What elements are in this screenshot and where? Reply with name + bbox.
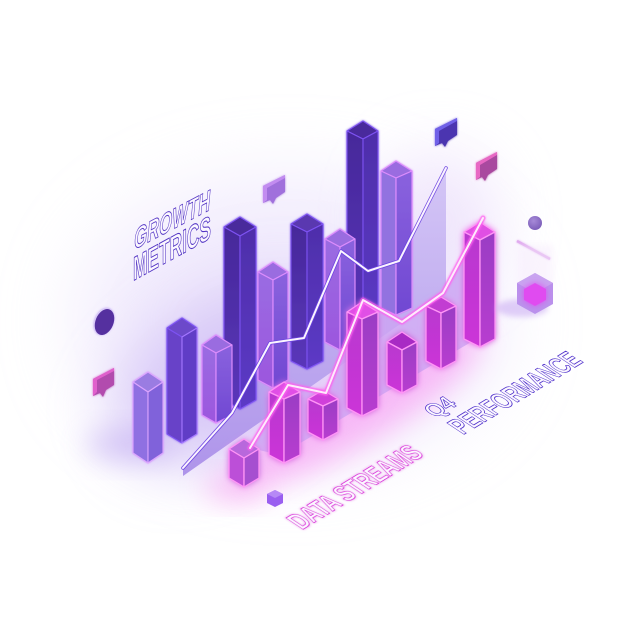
icon: light streak <box>517 241 550 259</box>
bar 1 <box>133 372 163 463</box>
bar 7 <box>325 229 355 350</box>
purple trend line <box>183 168 446 468</box>
label: GROWTH METRICS: GROWTH <box>133 182 212 257</box>
bars: purple back row <box>133 121 412 463</box>
pink bar 4 <box>347 302 378 416</box>
label: GROWTH METRICS: METRICS <box>133 209 211 289</box>
icon: magenta speech bubble <box>476 152 497 181</box>
icon: dark speech bubble <box>435 118 457 147</box>
icon: small hexagon <box>267 490 283 507</box>
icon: purple speech bubble top <box>263 175 285 204</box>
label: Q4 PERFORMANCE: Q4 <box>418 393 463 421</box>
bar 6 <box>291 214 323 369</box>
bar 8 <box>347 121 378 340</box>
area under pink line <box>250 218 483 455</box>
bar 4 <box>224 217 256 409</box>
icon: sphere <box>528 216 542 230</box>
floor glow: pink <box>205 310 496 510</box>
label: DATA STREAMS: DATA STREAMS <box>279 440 430 534</box>
pink bar 2 <box>269 382 300 463</box>
icon: glass cube <box>496 245 553 317</box>
label: Q4 PERFORMANCE <box>418 347 589 439</box>
bar 9 <box>381 161 412 315</box>
bars: pink front row <box>229 222 495 487</box>
icon: coin disc <box>89 304 119 339</box>
pink bar 6 <box>426 297 456 369</box>
pink trend line <box>250 218 483 448</box>
icon: pink speech bubble left <box>93 368 114 397</box>
pink bar 3 <box>308 390 338 440</box>
bar 3 <box>202 335 232 423</box>
bar 2 <box>167 318 197 443</box>
pink bar 5 <box>387 332 417 393</box>
pink bar 1 <box>229 439 259 487</box>
floor glow: purple <box>80 150 500 505</box>
label: Q4 PERFORMANCE: PERFORMANCE <box>440 347 589 439</box>
area under purple line <box>183 168 446 476</box>
pink bar 7 <box>464 222 495 347</box>
bar 5 <box>258 262 288 388</box>
